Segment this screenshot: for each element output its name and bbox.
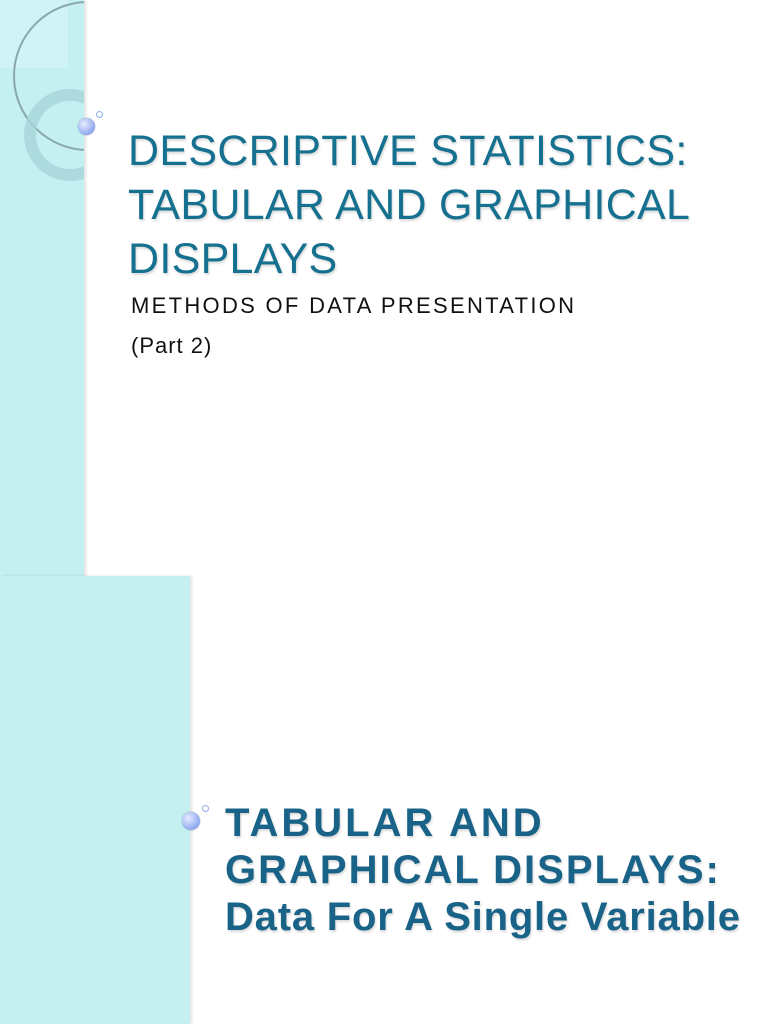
subtitle <box>131 293 576 358</box>
icon: top small circle <box>96 111 103 118</box>
title <box>128 127 690 283</box>
panel: bottom slide left strip <box>0 576 190 1024</box>
panel: top slide left strip <box>0 0 84 576</box>
title: TABULAR AND GRAPHICAL <box>128 181 690 229</box>
subtitle: (Part 2) <box>131 333 212 358</box>
icon: bottom small circle <box>202 805 209 812</box>
section heading: GRAPHICAL DISPLAYS: <box>225 848 721 892</box>
section heading: TABULAR AND <box>225 801 545 845</box>
section heading <box>225 801 741 942</box>
title: DISPLAYS <box>128 235 338 283</box>
icon: bottom bullet <box>182 812 200 830</box>
title: DESCRIPTIVE STATISTICS: <box>128 127 688 175</box>
icon: top bullet <box>78 118 95 135</box>
subtitle: METHODS OF DATA PRESENTATION <box>131 293 576 318</box>
section heading: Data For A Single Variable <box>225 895 741 939</box>
